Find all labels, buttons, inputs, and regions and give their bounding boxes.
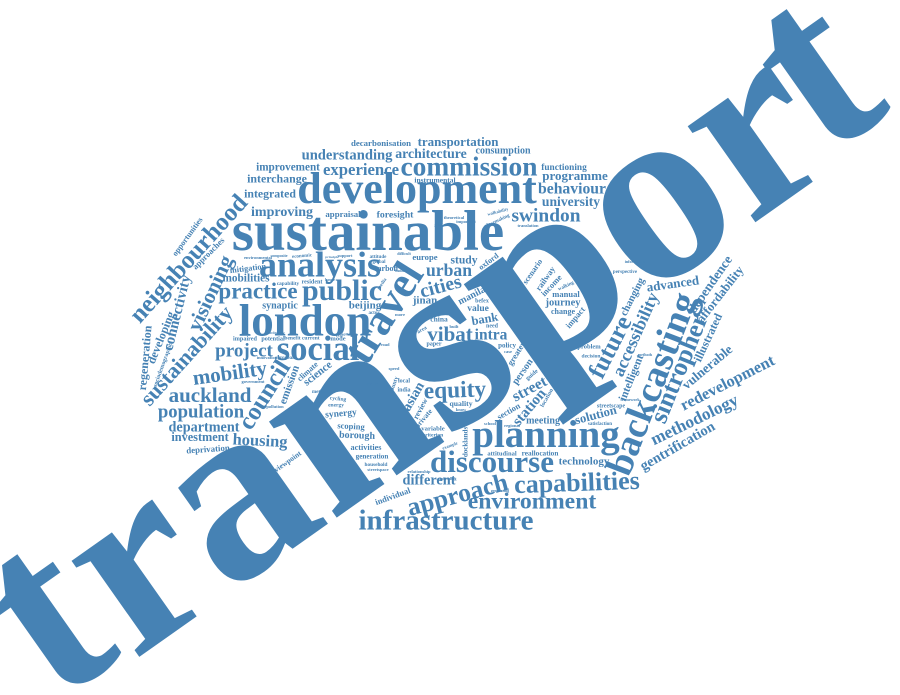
word: emission: emission [277, 364, 302, 406]
word: methodology: methodology [647, 390, 742, 449]
word: practice: practice [218, 278, 298, 303]
word: mobilities: mobilities [222, 273, 270, 285]
small words: streetspace [367, 467, 389, 472]
small words: built [449, 324, 459, 329]
small words: innovation [257, 355, 278, 360]
word: transportation: transportation [418, 134, 499, 149]
word: gentrification: gentrification [637, 419, 718, 474]
small words: paper [426, 341, 442, 347]
small words: know [456, 407, 467, 412]
word: regeneration: regeneration [135, 325, 155, 391]
small words: generating [491, 488, 509, 493]
word: bank: bank [470, 310, 499, 328]
small words: cycling [329, 396, 347, 403]
small words: location [540, 387, 555, 408]
word: redevelopment: redevelopment [677, 350, 778, 414]
small words: method [312, 390, 328, 395]
small words: support [337, 253, 353, 258]
small words: policy [498, 342, 516, 350]
word: planning: planning [472, 413, 620, 456]
word: generation: generation [356, 453, 388, 461]
word: advanced: advanced [646, 272, 701, 295]
word: swindon: swindon [512, 205, 581, 226]
small words: household [365, 462, 388, 468]
small words: need [486, 323, 499, 329]
small words: energy [328, 402, 344, 408]
word: functioning: functioning [541, 163, 587, 173]
small words: decision [582, 353, 600, 359]
word: capabilities: capabilities [514, 466, 640, 499]
word: manila: manila [456, 284, 488, 307]
small words: attitude [370, 255, 387, 260]
word: integrated: integrated [244, 187, 296, 201]
word: oxford: oxford [477, 251, 501, 272]
word: deprivation: deprivation [186, 443, 230, 456]
word: illustrated: illustrated [691, 311, 725, 364]
word: mitigation: mitigation [229, 262, 267, 275]
small words: satisfaction [588, 422, 612, 427]
word: department: department [169, 419, 240, 435]
small words: region [335, 331, 349, 338]
word: accessibility: accessibility [608, 289, 663, 379]
small words [153, 176, 653, 493]
small words: resident [302, 279, 322, 285]
word: viewpoint: viewpoint [272, 448, 303, 474]
word: different: different [403, 472, 456, 488]
word: mobility: mobility [191, 356, 269, 390]
small words: carbon [374, 264, 399, 273]
small words: regional [504, 423, 521, 428]
word: social: social [277, 329, 360, 368]
small words: methods [638, 352, 653, 357]
word: journey: journey [544, 297, 581, 308]
word: travel: travel [333, 253, 433, 372]
word: visioning: visioning [182, 251, 238, 335]
word: vulnerable: vulnerable [679, 342, 735, 392]
word: station: station [510, 385, 550, 429]
word: environment: environment [468, 488, 596, 514]
small words: walkability [487, 206, 510, 217]
word: neighbourhood: neighbourhood [124, 189, 253, 328]
small words: area [416, 325, 428, 335]
small words: mode [330, 335, 346, 342]
small words: instrumental [414, 176, 456, 185]
word: investment: investment [171, 430, 230, 444]
word: interchange: interchange [247, 172, 307, 186]
small words: environmental [244, 255, 273, 260]
word: commission: commission [401, 151, 537, 181]
word: individual: individual [374, 485, 412, 507]
small words: indicator [395, 268, 413, 273]
word: asian: asian [399, 379, 428, 414]
word: dependence: dependence [684, 252, 735, 316]
small words: difficult [397, 251, 411, 256]
small words: attitudinal [487, 450, 517, 457]
word: borough: borough [339, 430, 376, 442]
word: sintropher: sintropher [644, 309, 714, 427]
small words: criterion [423, 432, 443, 438]
word: auckland: auckland [169, 383, 252, 407]
word: infrastructure: infrastructure [358, 505, 534, 537]
small words: local [398, 378, 410, 384]
word: sustainable: sustainable [232, 200, 504, 263]
small words: efficiency [434, 209, 443, 231]
word: scoping: scoping [337, 420, 366, 432]
word: europe: europe [412, 252, 438, 262]
word: approaches: approaches [190, 235, 227, 271]
word: population: population [158, 401, 245, 422]
small words: quality [449, 399, 473, 408]
word: street: street [509, 373, 551, 405]
small words: review [411, 396, 430, 421]
word: manual: manual [552, 289, 580, 299]
small words: capability [277, 281, 300, 287]
word: value: value [467, 304, 489, 314]
small words: more [395, 312, 405, 317]
small words: impaired [233, 335, 258, 342]
small words: actor [368, 311, 380, 316]
word: climate: climate [295, 360, 320, 383]
word: technology: technology [559, 456, 610, 468]
small words: placemaking [484, 213, 511, 230]
small words: guide [525, 368, 540, 382]
word: impact: impact [563, 304, 587, 330]
word: study: study [450, 254, 478, 267]
word: changing: changing [619, 275, 648, 318]
small words: principle [325, 255, 339, 259]
word: greater: greater [505, 339, 527, 367]
small words: beijing [349, 300, 382, 312]
word: section: section [495, 400, 522, 422]
small words: perspective [613, 270, 638, 275]
word: science: science [301, 359, 334, 389]
word: decarbonisation: decarbonisation [351, 138, 411, 148]
word: cities: cities [418, 271, 464, 303]
small words: befex [475, 298, 489, 304]
small words: important [456, 219, 476, 224]
word: scenario: scenario [521, 257, 544, 286]
small words: proceeding [438, 476, 456, 481]
word: architecture: architecture [395, 146, 467, 161]
word: meeting: meeting [526, 415, 560, 426]
word: equity: equity [423, 376, 487, 404]
small words: government [242, 379, 265, 384]
small words: foresight [377, 209, 414, 220]
word: developing: developing [144, 309, 178, 366]
word: jinan: jinan [412, 295, 437, 307]
word: improvement: improvement [256, 162, 320, 174]
small words: media [377, 277, 389, 291]
small words: synaptic [262, 300, 298, 311]
small words: potential [261, 335, 285, 342]
small words: appraisal [325, 209, 361, 219]
small words: sociodemographic [153, 342, 174, 388]
word: discourse: discourse [430, 444, 554, 479]
small words: streetscape [597, 403, 625, 409]
small words: european [275, 356, 295, 361]
word: change: change [551, 307, 575, 316]
small words: example [441, 440, 458, 451]
word: experience: experience [323, 160, 399, 179]
small words: economic [292, 253, 313, 260]
small words: variable [421, 426, 445, 433]
word: intelligent: intelligent [617, 353, 646, 403]
word: project: project [215, 340, 274, 361]
small words: pollution [266, 404, 284, 409]
word: consumption: consumption [475, 145, 531, 156]
word: public: public [302, 274, 382, 307]
small words: china [430, 315, 448, 324]
small words: problem [577, 343, 601, 350]
small words: framework [620, 397, 640, 402]
word: programme: programme [542, 168, 608, 183]
word: council: council [233, 355, 296, 435]
word: london: london [239, 295, 371, 345]
word: urban: urban [426, 260, 472, 280]
word: intra: intra [475, 327, 508, 344]
word: development: development [297, 164, 537, 213]
word: university: university [542, 194, 600, 209]
small words: reallocation [522, 449, 558, 458]
small words: road [381, 342, 390, 347]
word: sustainability: sustainability [135, 300, 238, 411]
small words: composite [270, 253, 288, 258]
word: activities: activities [351, 443, 381, 452]
small words: school [484, 421, 497, 426]
word: synergy: synergy [325, 408, 357, 421]
word: solution: solution [573, 403, 618, 427]
small words: india [397, 387, 411, 393]
small words: walking [558, 281, 575, 292]
small words: theoretical [444, 215, 465, 220]
small words: speed [389, 366, 400, 371]
word: income: income [539, 272, 564, 298]
word: railway: railway [533, 264, 558, 292]
small words: translation [517, 223, 539, 228]
small words: docklands [462, 427, 470, 457]
word: analysis: analysis [259, 244, 381, 284]
word: backcasting: backcasting [598, 287, 706, 481]
small words: case [504, 349, 512, 354]
small words: relationship [408, 469, 431, 474]
small words: research [437, 223, 445, 241]
small words: sociology [267, 330, 285, 335]
word: connectivity: connectivity [160, 273, 195, 352]
small words: factor [366, 381, 378, 386]
word: affordability: affordability [694, 263, 747, 325]
small words: information [625, 259, 646, 264]
small words: house [325, 277, 335, 282]
word: opportunities: opportunities [170, 215, 205, 258]
small words: benefit current [284, 335, 320, 341]
word: improving: improving [251, 205, 313, 220]
word: housing: housing [232, 429, 289, 451]
word: vibat: vibat [427, 322, 473, 346]
word: understanding: understanding [302, 147, 393, 163]
word: person: person [510, 357, 536, 387]
small words: global [372, 260, 386, 265]
small words: county [389, 376, 400, 394]
word: behaviour: behaviour [538, 181, 606, 198]
word: approach: approach [404, 467, 511, 522]
word: future: future [583, 312, 637, 383]
small words: private [413, 406, 435, 430]
